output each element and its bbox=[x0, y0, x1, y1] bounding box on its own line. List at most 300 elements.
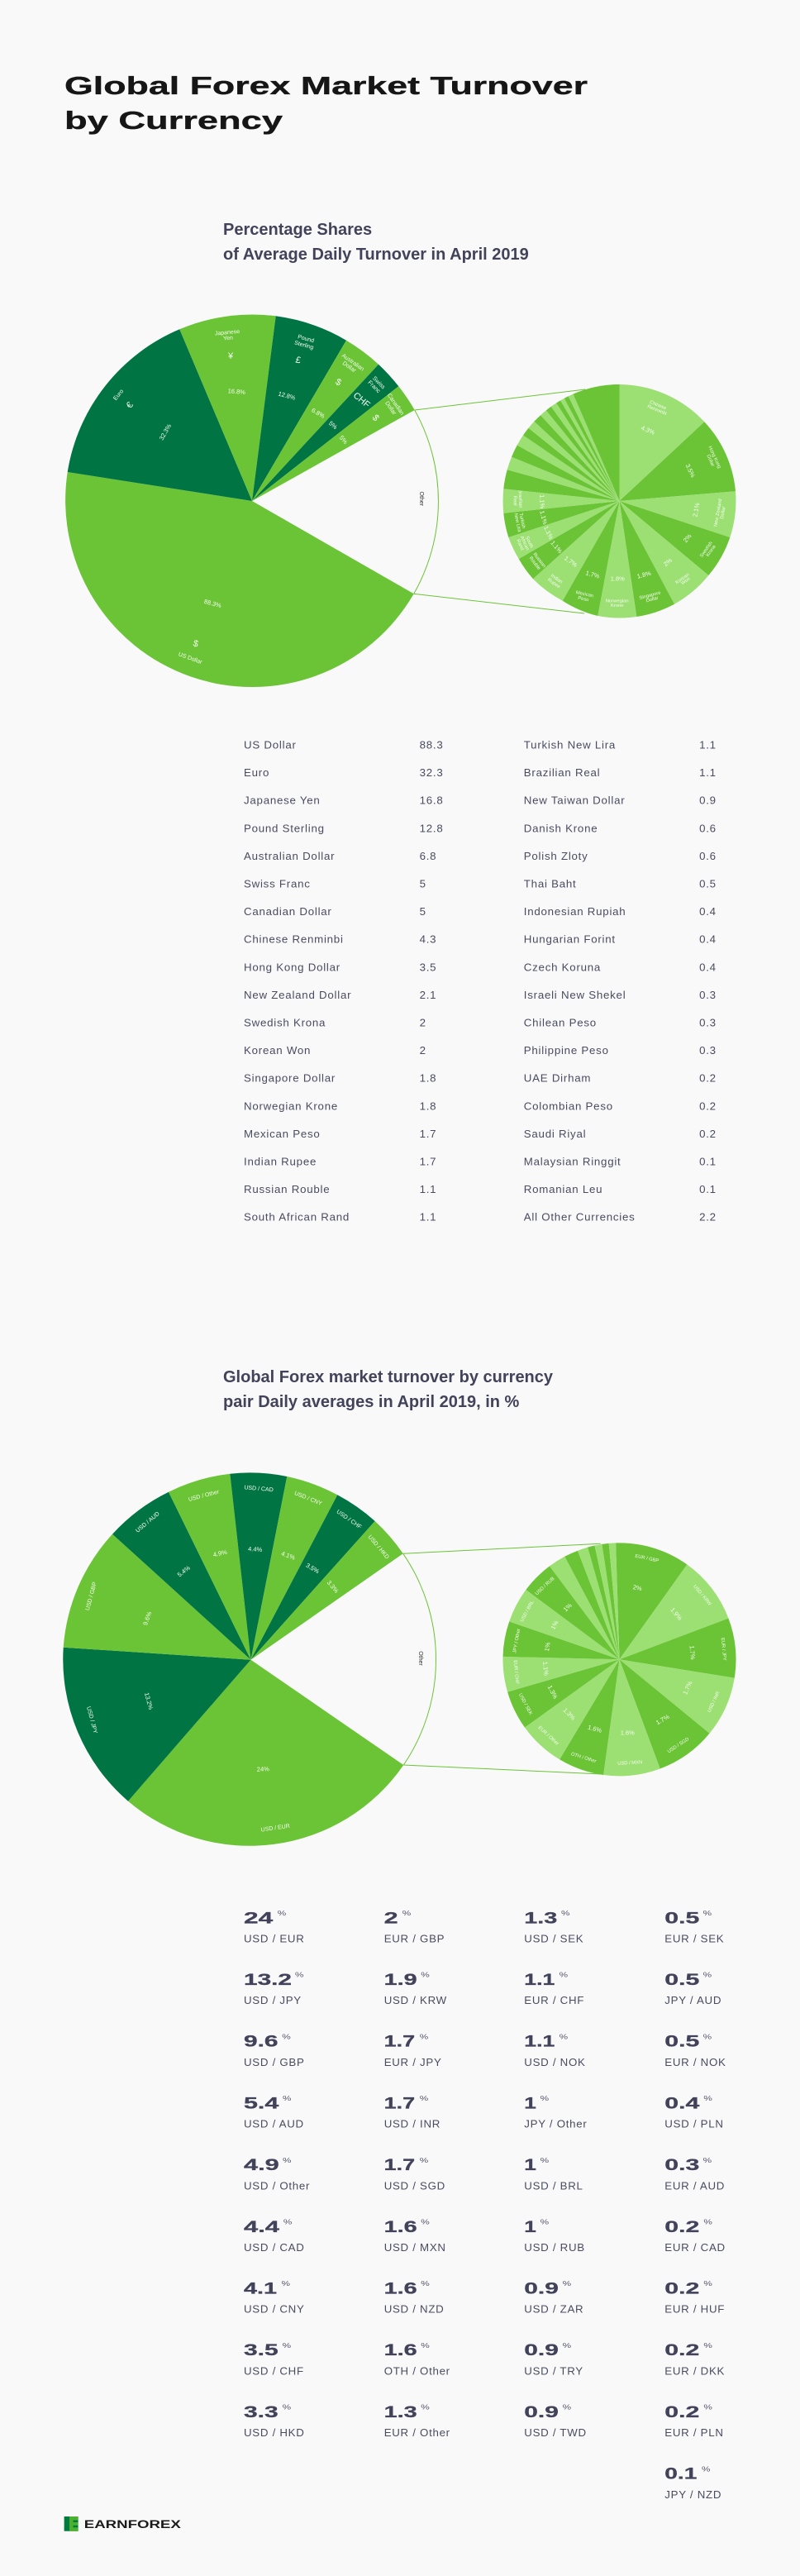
slice: OTH / Other: OTH / Other bbox=[570, 1752, 597, 1764]
slice: USD / SEK: 1.3% bbox=[546, 1684, 560, 1701]
slice: USD / BRL: USD / BRL bbox=[520, 1600, 536, 1623]
slice: USD / BRL: 1% bbox=[549, 1620, 560, 1631]
slice: USD / KRW: 1.9% bbox=[669, 1606, 683, 1622]
row: 0.1 bbox=[699, 1183, 717, 1195]
stat: OTH / Other: 1.6 bbox=[384, 2341, 417, 2359]
stat: EUR / PLN: 0.2 bbox=[664, 2403, 700, 2421]
row: Pound Sterling bbox=[244, 822, 325, 834]
slice: Brazilian Real bbox=[503, 489, 620, 513]
stats: currency pairs, column 1 bbox=[244, 1909, 310, 2439]
row: 88.3 bbox=[420, 739, 443, 751]
slice: South African Rand: African bbox=[519, 536, 530, 551]
slice: Chinese Renminbi: Chinese bbox=[649, 400, 667, 411]
slice: Swedish Krona: Swedish bbox=[699, 541, 714, 559]
row: Hungarian Forint bbox=[524, 933, 616, 946]
slice: Chinese Renminbi bbox=[620, 384, 704, 501]
row: 0.4 bbox=[699, 933, 717, 946]
stat: EUR / PLN bbox=[664, 2403, 724, 2439]
slice: Russian Rouble: 1.1% bbox=[549, 539, 564, 555]
slice: USD / CNY: USD / CNY bbox=[293, 1491, 323, 1507]
row bbox=[524, 822, 717, 834]
stat: EUR / AUD bbox=[664, 2156, 725, 2192]
stat: USD / MXN: USD / MXN bbox=[384, 2241, 446, 2254]
slice: USD / SEK: USD / SEK bbox=[517, 1693, 533, 1716]
stat: USD / BRL: USD / BRL bbox=[524, 2179, 583, 2192]
row: Chinese Renminbi bbox=[244, 933, 344, 946]
row: 1.1 bbox=[420, 1183, 436, 1195]
slice: USD / GBP: 9.6% bbox=[141, 1610, 154, 1626]
row bbox=[244, 933, 436, 946]
row: Thai Baht bbox=[524, 878, 576, 890]
stat: USD / CHF: % bbox=[283, 2341, 292, 2349]
stat: USD / SEK: 1.3 bbox=[524, 1909, 558, 1927]
stat: EUR / PLN: % bbox=[703, 2403, 713, 2411]
row bbox=[244, 1183, 436, 1195]
row: South African Rand bbox=[244, 1211, 350, 1224]
slice: Turkish New Lira: New Lira bbox=[512, 513, 521, 533]
slice: South African Rand: Rand bbox=[515, 539, 525, 551]
stat: USD / HKD: USD / HKD bbox=[244, 2426, 305, 2439]
stat: USD / SGD bbox=[384, 2156, 445, 2192]
heading: percentage shares: Percentage Shares bbox=[223, 221, 372, 239]
stat: USD / ZAR: % bbox=[563, 2279, 572, 2287]
slice: USD / AUD: USD / AUD bbox=[135, 1511, 161, 1534]
row: 0.4 bbox=[699, 905, 717, 918]
stat: EUR / NOK bbox=[664, 2032, 726, 2068]
stat: JPY / NZD: 0.1 bbox=[664, 2465, 698, 2483]
row bbox=[244, 1017, 426, 1028]
row bbox=[244, 739, 443, 751]
stat: USD / TRY: % bbox=[563, 2341, 572, 2349]
row: 0.3 bbox=[699, 989, 717, 1001]
slice: US Dollar: 88.3% bbox=[203, 598, 222, 609]
slice: Other: Other bbox=[417, 1651, 423, 1666]
stat: USD / Other: USD / Other bbox=[244, 2179, 310, 2192]
row: Philippine Peso bbox=[524, 1044, 609, 1057]
stat: USD / KRW bbox=[384, 1971, 447, 2006]
stat: USD / PLN bbox=[664, 2094, 724, 2130]
stat: USD / INR: USD / INR bbox=[384, 2118, 440, 2130]
stat: EUR / HUF: EUR / HUF bbox=[664, 2303, 725, 2316]
stat: USD / GBP: % bbox=[282, 2032, 291, 2040]
slice: Japanese Yen: 16.8% bbox=[227, 387, 246, 396]
row: 4.3 bbox=[420, 933, 436, 946]
slice: USD / CAD: 4.4% bbox=[248, 1545, 263, 1553]
stat: EUR / CHF: % bbox=[560, 1971, 569, 1979]
slice: Hong Kong Dollar: 3.5% bbox=[684, 463, 697, 479]
slice: USD / MXN: 1.6% bbox=[621, 1729, 635, 1736]
stat: USD / SEK: % bbox=[561, 1909, 570, 1917]
row: 6.8 bbox=[420, 850, 436, 862]
row bbox=[524, 1128, 717, 1140]
slice: USD / EUR bbox=[128, 1660, 403, 1846]
slice: USD / INR bbox=[620, 1659, 735, 1734]
row bbox=[524, 794, 717, 807]
slice: Indian Rupee: Rupee bbox=[546, 578, 561, 589]
row bbox=[244, 1044, 426, 1057]
row: 2 bbox=[420, 1017, 426, 1028]
slice: EUR / JPY bbox=[620, 1619, 736, 1678]
slice: Swiss Franc bbox=[252, 365, 398, 501]
slice: EUR / JPY: 1.7% bbox=[688, 1645, 697, 1660]
row bbox=[244, 794, 443, 807]
stat: EUR / CHF: EUR / CHF bbox=[524, 1994, 584, 2006]
row: 0.6 bbox=[699, 850, 717, 862]
stat: USD / RUB bbox=[524, 2217, 585, 2254]
stat: EUR / CAD bbox=[664, 2217, 726, 2254]
stat: USD / MXN bbox=[384, 2217, 446, 2254]
row: 0.2 bbox=[699, 1128, 717, 1140]
stat: USD / GBP: USD / GBP bbox=[244, 2056, 305, 2068]
stat: JPY / Other bbox=[524, 2094, 587, 2130]
stat: USD / EUR: % bbox=[278, 1909, 287, 1917]
stat: USD / EUR bbox=[244, 1909, 305, 1944]
stat: EUR / PLN: EUR / PLN bbox=[664, 2426, 724, 2439]
stat: EUR / JPY: % bbox=[420, 2032, 429, 2040]
row: 0.6 bbox=[699, 822, 717, 834]
slice: Euro: 32.3% bbox=[158, 422, 173, 441]
stat: USD / HKD bbox=[244, 2403, 305, 2439]
slice: Australian Dollar: $ bbox=[334, 377, 343, 388]
heading: currency pairs bbox=[223, 1368, 554, 1411]
slice: Other bbox=[414, 410, 438, 594]
stat: EUR / JPY: 1.7 bbox=[384, 2033, 415, 2051]
stat: USD / SGD: 1.7 bbox=[384, 2156, 415, 2174]
stat: USD / CAD: USD / CAD bbox=[244, 2241, 305, 2254]
stat: USD / SEK bbox=[524, 1909, 583, 1944]
stat: USD / RUB: 1 bbox=[524, 2218, 536, 2236]
slice: Pound Sterling: 12.8% bbox=[278, 390, 297, 402]
slice: USD / CAD bbox=[230, 1472, 287, 1660]
row bbox=[524, 1017, 717, 1028]
row: Czech Koruna bbox=[524, 961, 601, 973]
slice: USD / Other bbox=[169, 1474, 251, 1660]
stat: USD / AUD: % bbox=[283, 2094, 292, 2102]
slice: Hong Kong Dollar bbox=[620, 422, 736, 501]
slice: Indian Rupee bbox=[533, 501, 620, 601]
stat: JPY / AUD: % bbox=[703, 1971, 712, 1979]
slice: Norwegian Krone bbox=[598, 501, 636, 618]
slice: Norwegian Krone: 1.8% bbox=[611, 575, 625, 582]
stat: USD / ZAR: USD / ZAR bbox=[524, 2303, 583, 2316]
row: 0.1 bbox=[699, 1156, 717, 1167]
slice: USD / JPY: USD / JPY bbox=[85, 1706, 98, 1734]
slice: Euro bbox=[68, 329, 252, 501]
row bbox=[524, 1211, 717, 1224]
connector lines: other to breakdown pie bbox=[414, 389, 585, 613]
slice: Japanese Yen bbox=[179, 314, 276, 501]
row: Polish Zloty bbox=[524, 850, 588, 862]
stat: USD / PLN: USD / PLN bbox=[664, 2118, 724, 2130]
stat: USD / TRY bbox=[524, 2341, 583, 2377]
stat: JPY / AUD bbox=[664, 1971, 721, 2006]
stat: USD / RUB: % bbox=[540, 2217, 550, 2225]
heading: currency pairs: Global Forex market turnover by currency bbox=[223, 1368, 554, 1386]
row bbox=[244, 822, 443, 834]
stat: USD / AUD: USD / AUD bbox=[244, 2118, 304, 2130]
logo: EarnForex: EARNFOREX bbox=[84, 2518, 181, 2531]
stat: EUR / HUF bbox=[664, 2279, 725, 2316]
slice: OTH / Other bbox=[560, 1659, 620, 1775]
slice: Singapore Dollar: Singapore bbox=[639, 590, 661, 601]
stat: EUR / CAD: % bbox=[703, 2217, 713, 2225]
slice: Singapore Dollar bbox=[620, 501, 674, 617]
slice: USD / KRW bbox=[620, 1564, 728, 1659]
stat: USD / ZAR bbox=[524, 2279, 583, 2316]
stat: USD / Other bbox=[244, 2156, 310, 2192]
slice: JPY / Other: 1% bbox=[543, 1642, 552, 1652]
row bbox=[244, 1128, 436, 1140]
row: 1.8 bbox=[420, 1100, 436, 1112]
slice: EUR / Other bbox=[525, 1659, 620, 1759]
slice: South African Rand bbox=[508, 501, 620, 559]
stat: USD / NOK: USD / NOK bbox=[524, 2056, 586, 2068]
row: Singapore Dollar bbox=[244, 1072, 336, 1085]
row bbox=[524, 1183, 717, 1195]
table: currency list, left column bbox=[244, 739, 443, 1224]
stat: USD / TWD bbox=[524, 2403, 587, 2439]
slice: USD / Other: USD / Other bbox=[188, 1489, 221, 1503]
slice: USD / Other: 4.9% bbox=[212, 1548, 228, 1558]
stat: USD / TWD: 0.9 bbox=[524, 2403, 559, 2421]
slice: USD / AUD bbox=[112, 1492, 251, 1660]
row bbox=[524, 1100, 717, 1112]
slice: Brazilian Real: Real bbox=[512, 496, 517, 506]
slices: smallest pairs stripes bbox=[550, 1543, 620, 1659]
stat: USD / CNY: USD / CNY bbox=[244, 2303, 305, 2316]
stat: EUR / GBP: 2 bbox=[384, 1909, 398, 1927]
slice: New Zealand Dollar: Dollar bbox=[720, 506, 727, 519]
stat: USD / CNY: 4.1 bbox=[244, 2280, 277, 2298]
slice: Australian Dollar: 6.8% bbox=[310, 407, 326, 420]
row: Chilean Peso bbox=[524, 1017, 597, 1028]
row bbox=[524, 961, 717, 973]
stat: USD / JPY bbox=[244, 1971, 304, 2006]
row: 3.5 bbox=[420, 961, 436, 973]
stat: USD / NZD: USD / NZD bbox=[384, 2303, 444, 2316]
stat: USD / GBP bbox=[244, 2032, 305, 2068]
stat: EUR / NOK: % bbox=[703, 2032, 712, 2040]
row: 0.3 bbox=[699, 1017, 717, 1028]
slice: US Dollar bbox=[65, 472, 414, 687]
pie chart: major currencies bbox=[65, 314, 438, 687]
slice: US Dollar: US Dollar bbox=[178, 651, 203, 665]
slice: USD / RUB bbox=[526, 1566, 620, 1659]
stat: EUR / CHF bbox=[524, 1971, 584, 2006]
slice: Australian Dollar bbox=[252, 341, 379, 501]
stat: EUR / SEK: 0.5 bbox=[664, 1909, 700, 1927]
stat: USD / AUD bbox=[244, 2094, 304, 2130]
slice: USD / CNY: 4.1% bbox=[280, 1550, 297, 1562]
slice: USD / HKD: USD / HKD bbox=[367, 1534, 390, 1561]
row bbox=[524, 739, 717, 751]
title: by Currency bbox=[64, 106, 283, 135]
slice: Singapore Dollar: 1.8% bbox=[636, 570, 652, 580]
slice: EUR / CHF: 1.1% bbox=[541, 1661, 550, 1677]
stat: USD / AUD: 5.4 bbox=[244, 2094, 279, 2112]
slice: Korean Won: Won bbox=[680, 576, 692, 586]
row: Australian Dollar bbox=[244, 850, 335, 862]
slice: Korean Won: 2% bbox=[662, 556, 674, 568]
row: Canadian Dollar bbox=[244, 905, 332, 918]
stat: USD / TWD: % bbox=[563, 2403, 572, 2411]
slice: EUR / GBP: 2% bbox=[632, 1583, 643, 1592]
slice: Brazilian Real: 1.1% bbox=[538, 494, 546, 509]
slice: Swiss Franc: CHF bbox=[351, 390, 372, 410]
stat: USD / NOK: % bbox=[560, 2032, 569, 2040]
row bbox=[524, 1044, 717, 1057]
stat: USD / NOK bbox=[524, 2032, 586, 2068]
row bbox=[244, 961, 436, 973]
row: 1.1 bbox=[699, 766, 717, 779]
row bbox=[524, 933, 717, 946]
stat: OTH / Other: OTH / Other bbox=[384, 2364, 450, 2377]
heading: percentage shares bbox=[223, 221, 529, 264]
stat: USD / PLN: 0.4 bbox=[664, 2094, 700, 2112]
slice: JPY / Other: JPY / Other bbox=[512, 1629, 521, 1653]
slice: EUR / CHF: EUR / CHF bbox=[512, 1660, 519, 1685]
stat: EUR / Other: EUR / Other bbox=[384, 2426, 450, 2439]
slice: Japanese Yen: Japanese bbox=[215, 329, 240, 337]
stat: USD / CAD: % bbox=[283, 2217, 293, 2225]
row: 1.1 bbox=[420, 1211, 436, 1224]
stat: EUR / HUF: % bbox=[703, 2279, 713, 2287]
slice: Euro: Euro bbox=[112, 389, 125, 402]
stat: USD / NOK: 1.1 bbox=[524, 2033, 555, 2051]
stat: JPY / AUD: 0.5 bbox=[664, 1971, 700, 1989]
row: 12.8 bbox=[420, 822, 443, 834]
row bbox=[244, 850, 436, 862]
stat: USD / TWD: USD / TWD bbox=[524, 2426, 587, 2439]
row bbox=[244, 1156, 436, 1167]
stat: EUR / AUD: 0.3 bbox=[664, 2156, 700, 2174]
stat: EUR / GBP: EUR / GBP bbox=[384, 1933, 445, 1944]
stat: EUR / CHF: 1.1 bbox=[524, 1971, 555, 1989]
slice: Russian Rouble bbox=[519, 501, 620, 579]
stat: USD / Other: 4.9 bbox=[244, 2156, 279, 2174]
row bbox=[524, 766, 717, 779]
stat: JPY / NZD: % bbox=[702, 2464, 711, 2473]
row: 0.2 bbox=[699, 1072, 717, 1085]
slice: Norwegian Krone: Norwegian bbox=[606, 599, 629, 603]
slice: USD / CHF bbox=[251, 1495, 375, 1660]
slice: Euro: € bbox=[125, 400, 136, 411]
stat: EUR / Other bbox=[384, 2403, 450, 2439]
stat: USD / TRY: USD / TRY bbox=[524, 2364, 583, 2377]
stat: USD / NZD: 1.6 bbox=[384, 2280, 417, 2298]
slice: Indian Rupee: Indian bbox=[550, 574, 563, 585]
stat: EUR / CAD: EUR / CAD bbox=[664, 2241, 726, 2254]
row: Brazilian Real bbox=[524, 766, 600, 779]
slice: Turkish New Lira bbox=[503, 501, 620, 537]
slice: USD / CHF: USD / CHF bbox=[336, 1509, 362, 1530]
slice: Chinese Renminbi: Renminbi bbox=[646, 404, 667, 417]
slice: Mexican Peso: 1.7% bbox=[585, 569, 601, 580]
stat: EUR / DKK bbox=[664, 2341, 725, 2377]
row: Indian Rupee bbox=[244, 1156, 317, 1167]
stat: USD / PLN: % bbox=[703, 2094, 713, 2102]
row bbox=[244, 905, 426, 918]
heading: currency pairs: pair Daily averages in April 2019, in % bbox=[223, 1393, 520, 1411]
slice: USD / JPY bbox=[63, 1648, 250, 1801]
slice: USD / HKD: 3.3% bbox=[326, 1579, 340, 1595]
row: 0.5 bbox=[699, 878, 717, 890]
slice: New Zealand Dollar bbox=[620, 491, 736, 537]
stat: USD / SGD: % bbox=[420, 2156, 429, 2164]
slice: Mexican Peso bbox=[563, 501, 620, 616]
stat: USD / HKD: % bbox=[283, 2403, 292, 2411]
slice: USD / SGD: USD / SGD bbox=[667, 1737, 690, 1754]
stat: EUR / DKK: % bbox=[703, 2341, 713, 2349]
row: Japanese Yen bbox=[244, 794, 321, 807]
slice: EUR / GBP bbox=[616, 1543, 687, 1659]
row bbox=[524, 905, 717, 918]
stats: currency pairs, column 4 bbox=[664, 1909, 726, 2501]
stats: currency pairs, column 3 bbox=[524, 1909, 587, 2439]
slice: Turkish New Lira: 1.1% bbox=[538, 510, 549, 526]
slice: Canadian Dollar: Dollar bbox=[383, 400, 398, 417]
slice: Pound Sterling: £ bbox=[294, 355, 302, 366]
slice: Chinese Renminbi: 4.3% bbox=[640, 424, 656, 436]
slice: EUR / GBP: EUR / GBP bbox=[635, 1554, 660, 1564]
stat: JPY / Other: % bbox=[540, 2094, 550, 2102]
slice: Swedish Krona bbox=[620, 501, 730, 575]
stat: JPY / Other: 1 bbox=[524, 2094, 536, 2112]
stat: USD / CHF: USD / CHF bbox=[244, 2364, 304, 2377]
slice: Canadian Dollar bbox=[252, 386, 415, 501]
stat: USD / KRW: USD / KRW bbox=[384, 1994, 447, 2006]
slice: Other bbox=[403, 1553, 436, 1765]
slice: Norwegian Krone: Krone bbox=[611, 603, 623, 608]
slice: New Zealand Dollar: New Zealand bbox=[713, 499, 723, 527]
row bbox=[244, 1100, 436, 1112]
row: 2.1 bbox=[420, 989, 436, 1001]
row: New Taiwan Dollar bbox=[524, 794, 625, 807]
row: Malaysian Ringgit bbox=[524, 1156, 621, 1167]
heading: percentage shares: of Average Daily Turnover in April 2019 bbox=[223, 246, 529, 264]
row: Norwegian Krone bbox=[244, 1100, 338, 1112]
slice: Hong Kong Dollar: Dollar bbox=[705, 454, 715, 467]
stat: USD / EUR: USD / EUR bbox=[244, 1933, 305, 1944]
stat: EUR / GBP: % bbox=[402, 1909, 412, 1917]
slice: USD / EUR: USD / EUR bbox=[260, 1824, 290, 1834]
stat: EUR / NOK: 0.5 bbox=[664, 2033, 700, 2051]
slice: Russian Rouble: Russian bbox=[531, 552, 546, 569]
stat: EUR / SEK: % bbox=[703, 1909, 712, 1917]
stat: EUR / SEK bbox=[664, 1909, 724, 1944]
slice: Australian Dollar: Dollar bbox=[341, 360, 357, 374]
slice: EUR / Other: 1.3% bbox=[561, 1706, 577, 1722]
slice: Turkish New Lira: Turkish bbox=[517, 513, 526, 529]
row bbox=[244, 878, 426, 890]
slice: USD / MXN bbox=[603, 1659, 660, 1776]
stat: USD / RUB: USD / RUB bbox=[524, 2241, 585, 2254]
slice: USD / RUB: USD / RUB bbox=[535, 1577, 556, 1596]
slice: Swedish Krona: 2% bbox=[682, 532, 693, 544]
stat: USD / CNY: % bbox=[281, 2279, 291, 2287]
row: 0.9 bbox=[699, 794, 717, 807]
stat: USD / CAD bbox=[244, 2217, 305, 2254]
row: 2.2 bbox=[699, 1211, 717, 1224]
stat: USD / TRY: 0.9 bbox=[524, 2341, 559, 2359]
stat: EUR / DKK: 0.2 bbox=[664, 2341, 700, 2359]
stat: USD / NZD bbox=[384, 2279, 444, 2316]
slice: Korean Won: Korean bbox=[675, 572, 690, 585]
slice: South African Rand: 1.1% bbox=[542, 525, 555, 541]
row: 0.4 bbox=[699, 961, 717, 973]
row bbox=[244, 1211, 436, 1224]
stat: EUR / Other: 1.3 bbox=[384, 2403, 417, 2421]
